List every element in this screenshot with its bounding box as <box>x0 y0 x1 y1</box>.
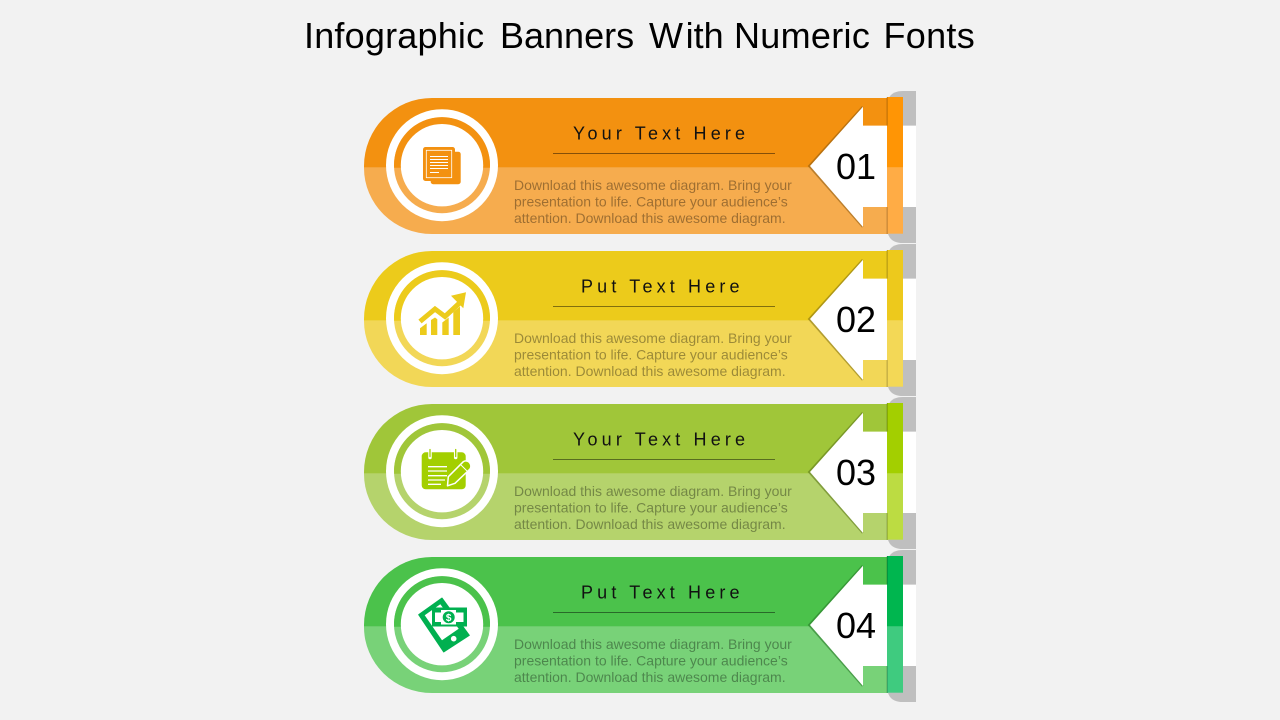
heading: Your Text Here <box>573 430 749 450</box>
arrow with number tab <box>809 107 916 227</box>
grey side tab <box>887 397 916 549</box>
arrow with number tab <box>809 566 916 686</box>
grey side tab <box>887 91 916 243</box>
body text: Download this awesome diagram. Bring your <box>514 483 792 499</box>
body text: attention. Download this awesome diagram. <box>514 210 786 226</box>
icon: documents <box>423 147 461 184</box>
band upper half <box>364 251 888 321</box>
heading rule <box>553 459 775 460</box>
badge circle <box>386 109 498 221</box>
title: Banners <box>500 15 644 56</box>
grey side tab <box>887 550 916 702</box>
band upper half <box>364 404 888 474</box>
heading rule <box>553 612 775 613</box>
colour strip <box>887 250 903 387</box>
number: 01 <box>836 146 876 187</box>
badge circle <box>386 262 498 374</box>
title: W <box>649 15 683 56</box>
icon: phone with banknote <box>419 598 469 652</box>
panel: banner 01 <box>364 91 916 243</box>
title: Infographic <box>304 15 495 56</box>
panel: banner 03 <box>364 397 916 549</box>
body text: Download this awesome diagram. Bring your <box>514 177 792 193</box>
body text: presentation to life. Capture your audience’s <box>514 499 788 515</box>
colour strip <box>887 556 903 693</box>
heading rule <box>553 153 775 154</box>
body text: presentation to life. Capture your audience’s <box>514 193 788 209</box>
heading: Put Text Here <box>581 276 744 296</box>
title: Numeric <box>734 15 880 56</box>
grey side tab <box>887 244 916 396</box>
band upper half <box>364 557 888 627</box>
band lower half <box>364 627 888 693</box>
band upper half <box>364 98 888 168</box>
badge circle <box>386 568 498 680</box>
body text: attention. Download this awesome diagram. <box>514 363 786 379</box>
panel: banner 04 <box>364 550 916 702</box>
panel: banner 02 <box>364 244 916 396</box>
band lower half <box>364 168 888 234</box>
number: 03 <box>836 452 876 493</box>
colour strip <box>887 403 903 540</box>
title: ith <box>686 15 734 56</box>
heading: Put Text Here <box>581 582 744 602</box>
icon: calendar and pencil <box>422 450 471 489</box>
badge circle <box>386 415 498 527</box>
arrow with number tab <box>809 413 916 533</box>
icon: phone with banknote: $ <box>446 613 452 624</box>
heading rule <box>553 306 775 307</box>
number: 04 <box>836 605 876 646</box>
colour strip <box>887 97 903 234</box>
band lower half <box>364 321 888 387</box>
heading: Your Text Here <box>573 124 749 144</box>
number: 02 <box>836 299 876 340</box>
arrow with number tab <box>809 260 916 380</box>
body text: presentation to life. Capture your audience’s <box>514 652 788 668</box>
title: Fonts <box>884 15 975 56</box>
body text: attention. Download this awesome diagram. <box>514 516 786 532</box>
body text: Download this awesome diagram. Bring your <box>514 636 792 652</box>
icon: growth chart <box>420 292 466 335</box>
body text: attention. Download this awesome diagram. <box>514 669 786 685</box>
band lower half <box>364 474 888 540</box>
body text: Download this awesome diagram. Bring your <box>514 330 792 346</box>
body text: presentation to life. Capture your audience’s <box>514 346 788 362</box>
